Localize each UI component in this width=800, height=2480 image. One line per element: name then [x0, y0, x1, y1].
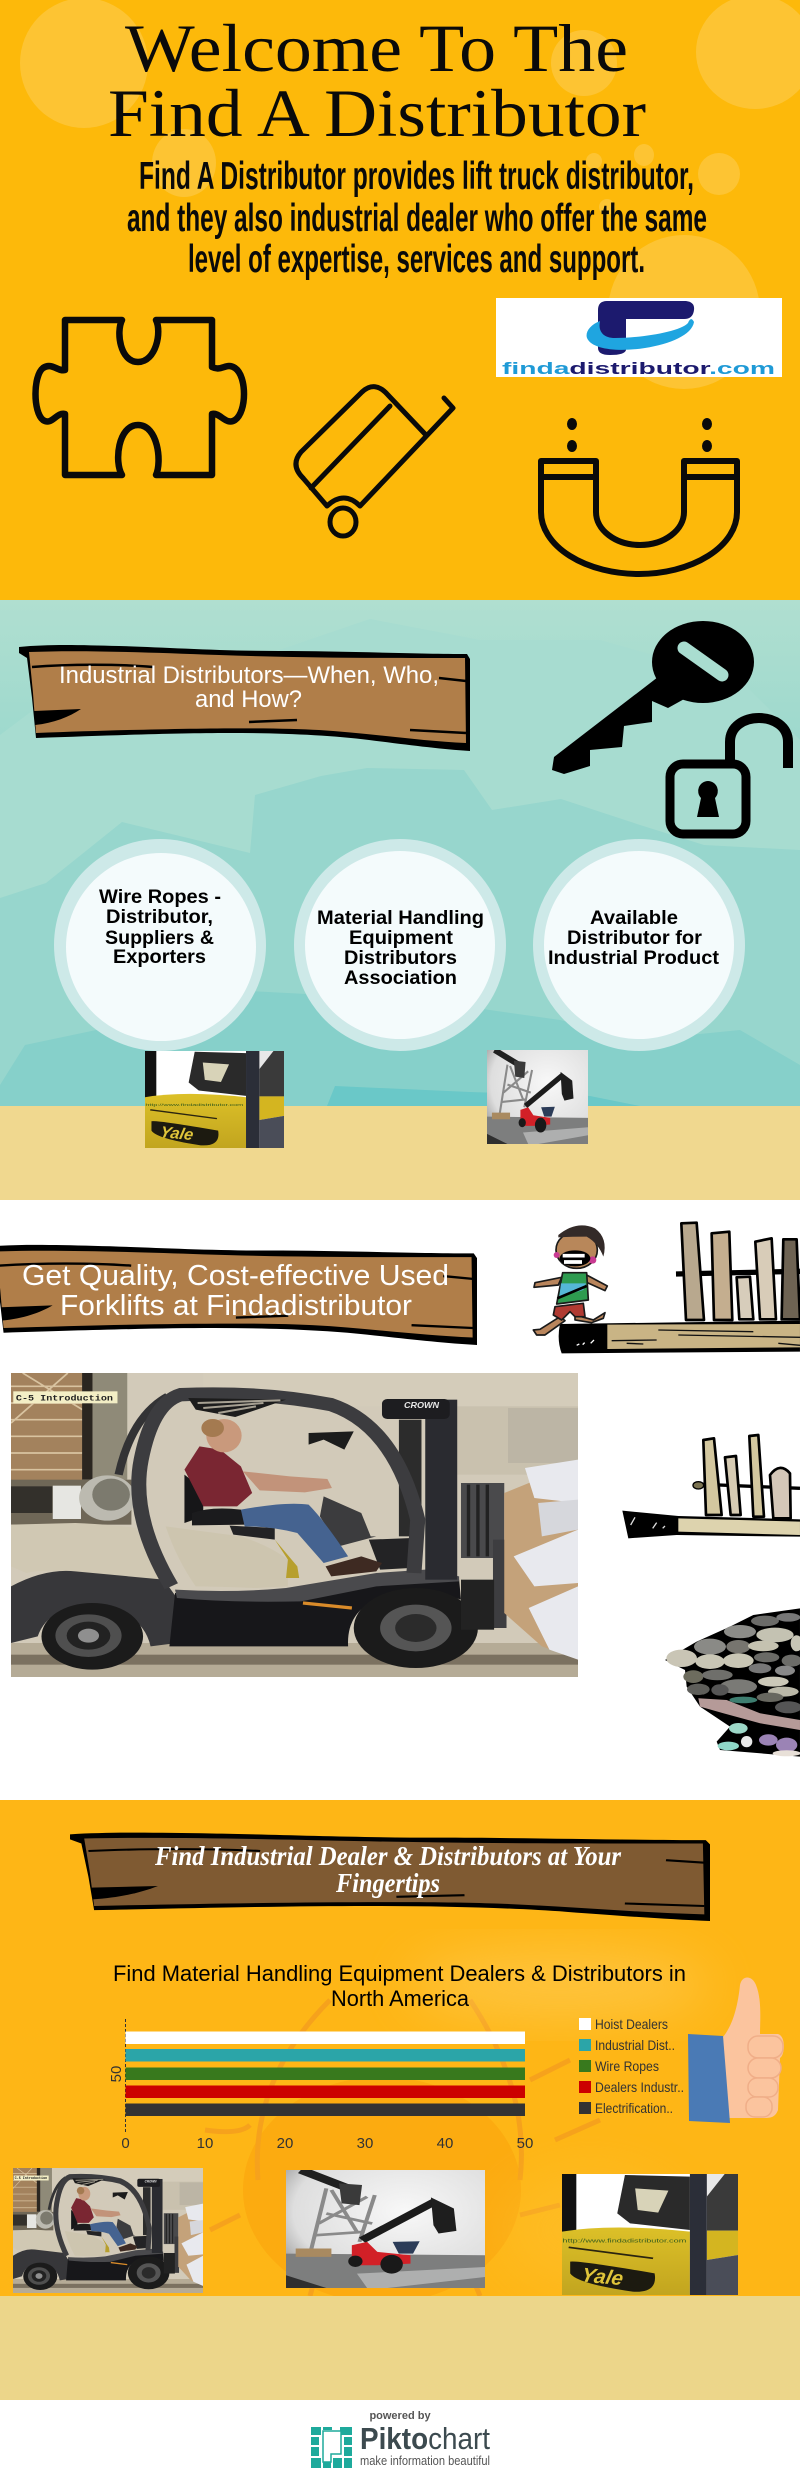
- heading plank: used forklifts: Forklifts at Findadistributor: [60, 1290, 412, 1322]
- bar chart: [108, 2019, 533, 2152]
- circle: material handling: [294, 839, 506, 1051]
- icon: puzzle piece: [36, 320, 244, 475]
- circle: wire ropes: [54, 839, 266, 1051]
- panel: sand band two: [0, 2296, 800, 2400]
- photo: crown forklift small: [13, 2168, 203, 2293]
- panel: sand band one: [0, 1106, 800, 1200]
- chart title: Find Material Handling Equipment Dealers & Distributors in: [113, 1961, 686, 1986]
- circle: material handling: Material Handling: [317, 908, 484, 929]
- chart legend: [579, 2016, 684, 2116]
- heading plank: fingertips: Fingertips: [335, 1868, 440, 1898]
- photo: red reach stacker small: [487, 1050, 588, 1144]
- panel: welcome section: [0, 0, 800, 600]
- title: Find A Distributor: [108, 75, 646, 151]
- icon: thumbs up: [688, 1978, 784, 2123]
- heading plank: when, who, how: and How?: [195, 686, 302, 713]
- photo: yale forklift small: [145, 1051, 284, 1148]
- circle: wire ropes: Distributor,: [106, 907, 213, 928]
- heading plank: used forklifts: [0, 1245, 477, 1345]
- circle: material handling: Equipment: [349, 928, 454, 949]
- chart legend: Electrification..: [595, 2100, 673, 2116]
- heading plank: when, who, how: [19, 645, 470, 751]
- panel: used forklifts section: [0, 1200, 800, 1800]
- bar chart: 40: [437, 2135, 453, 2152]
- photo: crown forklift: [11, 1373, 578, 1677]
- bar chart: 50: [108, 2066, 125, 2082]
- icon: luggage trolley: [296, 387, 453, 536]
- icon: piktochart logo: [311, 2427, 352, 2468]
- circle: available distributor: Available: [590, 908, 678, 929]
- icon: key: [552, 621, 754, 774]
- intro text: [127, 155, 707, 281]
- icon: open padlock: [670, 718, 788, 834]
- illustration: small fence: [622, 1435, 800, 1538]
- circle: wire ropes: Suppliers &: [105, 928, 214, 949]
- chart legend: Hoist Dealers: [595, 2016, 668, 2032]
- circle: available distributor: Industrial Product: [548, 948, 720, 969]
- circle: wire ropes: Exporters: [113, 947, 206, 968]
- bar chart: 10: [197, 2135, 213, 2152]
- circle: available distributor: Distributor for: [567, 928, 703, 949]
- panel: dealers and distributors section: [0, 1800, 800, 2303]
- title: [108, 10, 646, 151]
- title: Welcome To The: [125, 10, 628, 86]
- heading plank: fingertips: [70, 1833, 710, 1921]
- logo: findadistributor.com: finda distributor .com: [502, 359, 775, 378]
- footer: piktochart: make information beautiful: [360, 2454, 490, 2468]
- circle: material handling: Association: [344, 968, 457, 989]
- bar chart: 0: [121, 2135, 130, 2152]
- illustration: pile of rocks: [665, 1608, 800, 1757]
- footer: piktochart: Piktochart: [360, 2421, 490, 2456]
- illustration: boy on fence: [533, 1223, 800, 1353]
- circle: available distributor: [533, 839, 745, 1051]
- bar chart: 50: [517, 2135, 533, 2152]
- heading plank: fingertips: Find Industrial Dealer & Distributors at Your: [154, 1841, 621, 1871]
- chart title: North America: [331, 1986, 470, 2011]
- footer: piktochart: [0, 2400, 800, 2480]
- photo: yale forklift: [562, 2174, 738, 2295]
- footer: piktochart: powered by: [369, 2410, 431, 2422]
- chart legend: Dealers Industr..: [595, 2079, 684, 2095]
- circle: material handling: Distributors: [344, 948, 457, 969]
- chart legend: Wire Ropes: [595, 2058, 659, 2074]
- chart title: [113, 1961, 686, 2011]
- photo: reach stacker: [286, 2170, 485, 2288]
- bar chart: 30: [357, 2135, 373, 2152]
- icon: magnet: [541, 418, 737, 574]
- chart legend: Industrial Dist..: [595, 2037, 675, 2053]
- logo: findadistributor.com: [496, 298, 782, 378]
- bar chart: 20: [277, 2135, 293, 2152]
- heading plank: used forklifts: Get Quality, Cost-effective Used: [22, 1260, 449, 1292]
- panel: industrial distributors section: [0, 600, 800, 1106]
- heading plank: when, who, how: Industrial Distributors—When, Who,: [59, 662, 439, 689]
- circle: wire ropes: Wire Ropes -: [99, 887, 221, 908]
